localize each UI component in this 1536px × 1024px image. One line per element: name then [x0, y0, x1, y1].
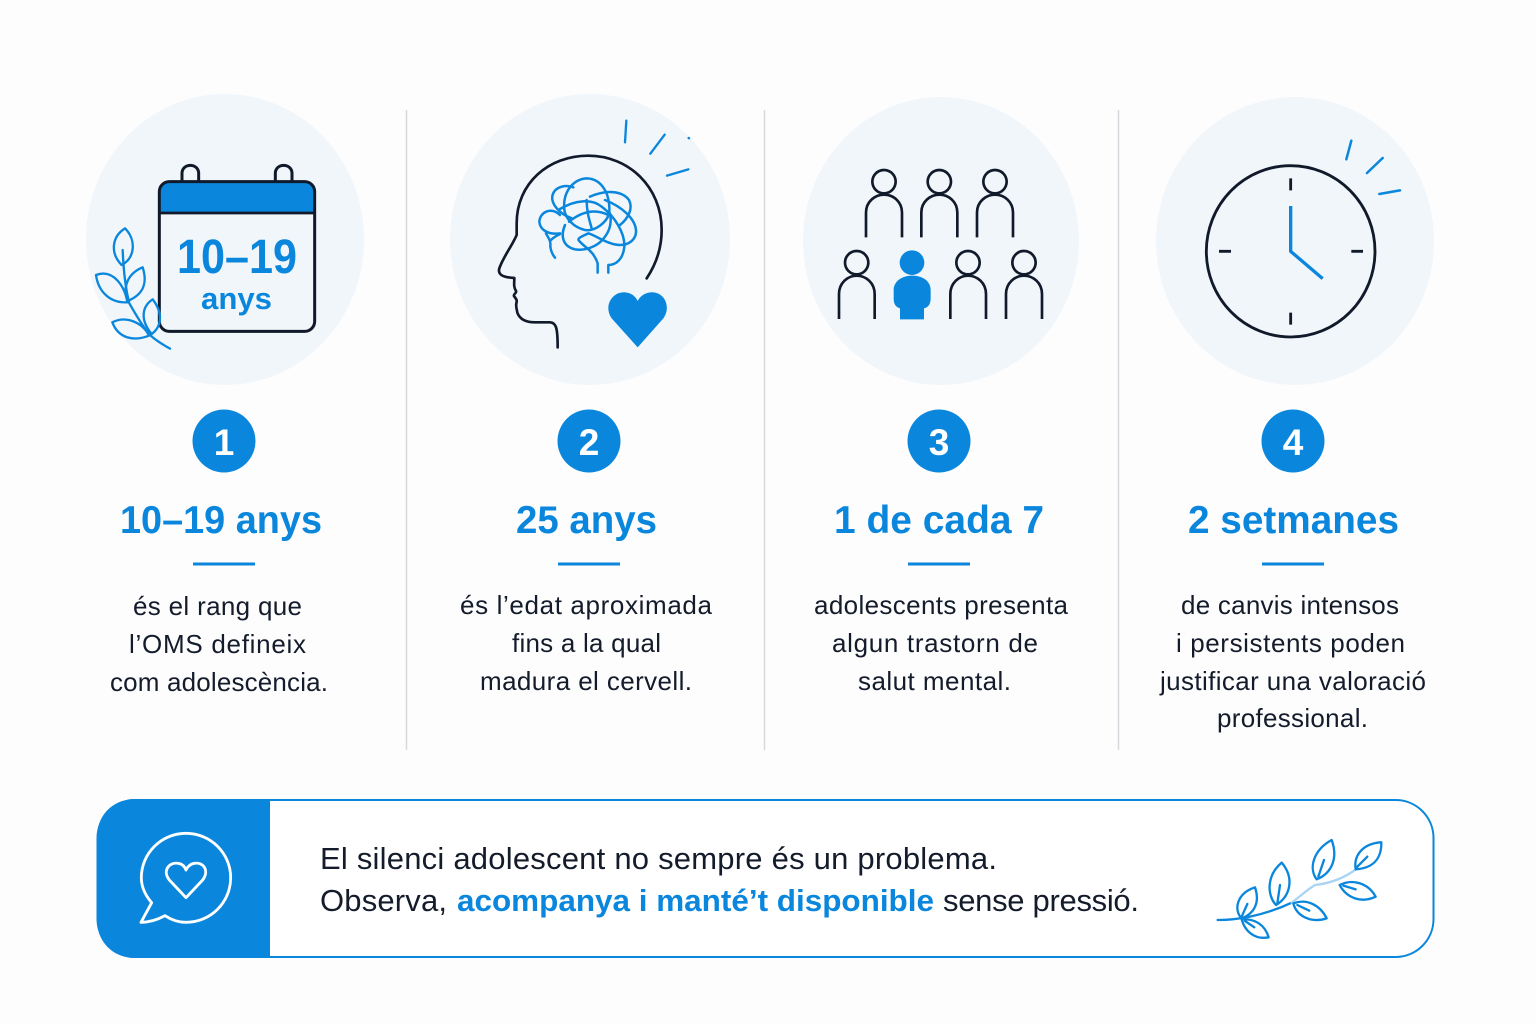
- text block 3: algun trastorn de: [832, 628, 1038, 658]
- text block 2: fins a la qual: [512, 628, 661, 658]
- text block 4: i persistents poden: [1176, 628, 1405, 658]
- text block 3: [814, 590, 1069, 696]
- icon: calendar: [159, 165, 315, 331]
- number badge 2: 2: [579, 422, 599, 463]
- text block 4: [1159, 590, 1426, 733]
- message text: sense pressió.: [943, 883, 1139, 918]
- icon: olive branch: [1218, 840, 1381, 938]
- icon: calendar: 10–19: [177, 231, 297, 284]
- text block 3: salut mental.: [858, 666, 1011, 696]
- panel: closing message banner: [97, 799, 1434, 958]
- icon circle background 3: [803, 97, 1079, 385]
- banner outline: [98, 800, 1434, 957]
- icon: head with tangled brain and heart: [499, 121, 689, 347]
- icon: leaf sprig: [96, 228, 170, 349]
- heading 4: 2 setmanes: [1188, 499, 1399, 542]
- panel: column 4, two weeks: [1156, 97, 1434, 733]
- number badge 3: 3: [929, 422, 949, 463]
- number badge 2: [558, 410, 620, 472]
- icon circle background 1: [86, 94, 364, 385]
- number badge 1: 1: [214, 422, 234, 463]
- text block 1: [110, 591, 328, 697]
- message text: El silenci adolescent no sempre és un problema.: [320, 841, 997, 876]
- panel: column 2, brain maturity: [450, 94, 730, 696]
- text block 2: és l’edat aproximada: [460, 590, 713, 620]
- icon: calendar: anys: [201, 281, 272, 316]
- number badge 4: [1262, 410, 1324, 472]
- icon circle background 2: [450, 94, 730, 385]
- icon circle background 4: [1156, 97, 1434, 385]
- heading 1: 10–19 anys: [120, 499, 322, 542]
- icon: clock: [1206, 141, 1400, 337]
- icon: speech bubble with heart: [141, 833, 231, 922]
- text block 1: com adolescència.: [110, 667, 328, 697]
- text block 2: madura el cervell.: [480, 666, 692, 696]
- number badge 3: [908, 410, 970, 472]
- text block 3: adolescents presenta: [814, 590, 1069, 620]
- panel: column 3, prevalence: [803, 97, 1079, 696]
- message text: Observa,: [320, 883, 447, 918]
- text block 4: professional.: [1217, 703, 1368, 733]
- text block 1: l’OMS defineix: [129, 629, 306, 659]
- text block 4: de canvis intensos: [1181, 590, 1399, 620]
- message text: [320, 841, 1139, 918]
- number badge 1: [192, 410, 256, 472]
- text block 4: justificar una valoració: [1159, 666, 1426, 696]
- icon: group of seven people, one highlighted: [839, 170, 1042, 319]
- number badge 4: 4: [1283, 422, 1304, 463]
- panel: column 1, age range: [86, 94, 364, 697]
- heading 3: 1 de cada 7: [834, 499, 1044, 542]
- message text: acompanya i manté’t disponible: [457, 883, 934, 918]
- text block 2: [460, 590, 713, 696]
- heading 2: 25 anys: [516, 499, 657, 542]
- banner blue block: [97, 799, 270, 958]
- text block 1: és el rang que: [133, 591, 302, 621]
